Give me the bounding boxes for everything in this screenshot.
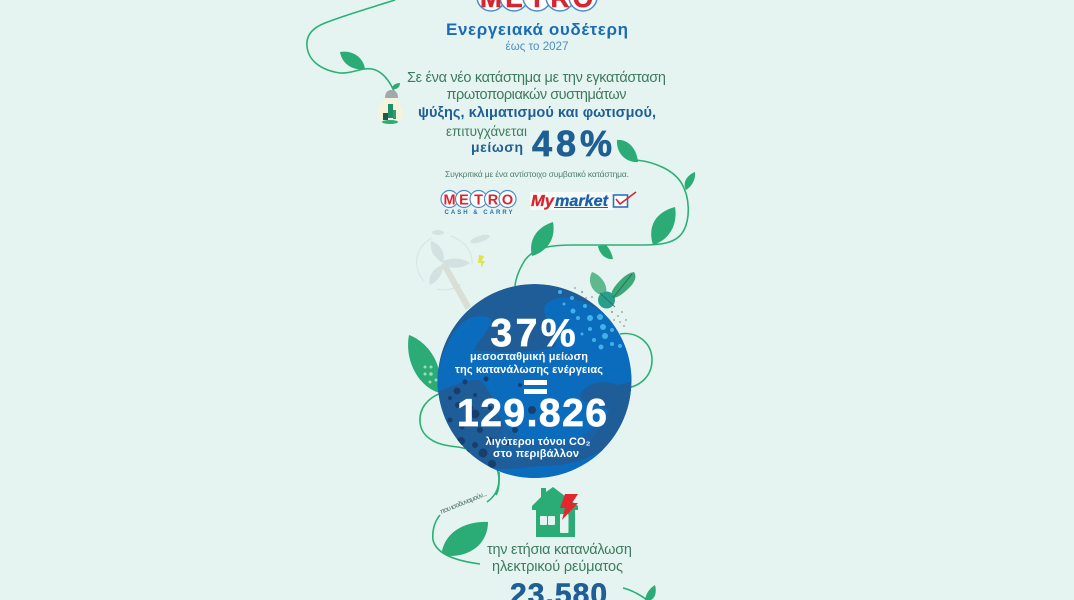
dots: dark blue	[446, 376, 536, 468]
logo: METRO Cash & Carry: E	[459, 192, 469, 208]
text block: annual electricity: την ετήσια κατανάλωση	[487, 542, 632, 558]
globe text: λιγότεροι τόνοι CO₂	[486, 436, 591, 448]
text block: intro	[407, 70, 666, 155]
vine: bottom left	[433, 472, 499, 564]
vine: globe right loop	[620, 334, 652, 388]
continent: bright blue	[430, 298, 640, 442]
title: Ενεργειακά ουδέτερη	[446, 20, 628, 39]
continent: lower centre	[496, 410, 610, 460]
text block: intro: μείωση	[471, 139, 523, 155]
globe text	[455, 312, 607, 460]
text block: annual electricity	[487, 542, 632, 575]
stat: 48%: 48%	[532, 123, 612, 164]
logo: METRO Cash & Carry: O	[502, 192, 513, 208]
vine: globe left loop	[408, 335, 499, 495]
globe text: 37%	[490, 312, 576, 355]
globe	[438, 284, 632, 478]
vine: top left	[307, 0, 400, 91]
logo: METRO Cash & Carry	[441, 190, 516, 216]
continent: bottom lens	[490, 449, 604, 478]
text block: annual electricity: ηλεκτρικού ρεύματος	[492, 559, 623, 575]
text block: intro: Σε ένα νέο κατάστημα με την εγκατάσταση	[407, 70, 666, 86]
text block: intro: ψύξης, κλιματισμού και φωτισμού,	[418, 105, 656, 121]
logo: My market	[530, 192, 636, 210]
globe text: 129.826	[457, 392, 607, 435]
logo: METRO top	[477, 0, 597, 13]
icon: light bulb	[378, 90, 403, 124]
logo: METRO Cash & Carry: M	[443, 192, 456, 208]
logo: My market: market	[555, 193, 609, 210]
text block: intro: επιτυγχάνεται	[446, 124, 527, 139]
icon: wind turbine	[417, 230, 490, 310]
logo: METRO Cash & Carry: R	[488, 192, 499, 208]
leaves on globe	[574, 272, 635, 327]
dots: light blue	[558, 290, 622, 350]
text block: intro: πρωτοποριακών συστημάτων	[446, 87, 626, 103]
note: comparison: Συγκριτικά με ένα αντίστοιχο συμβατικό κατάστημα.	[445, 169, 629, 179]
globe text: μεσοσταθμική μείωση	[470, 351, 588, 363]
icon: house with lightning	[532, 487, 578, 537]
label: rotated caption: που ισοδυναμούν...	[439, 490, 488, 516]
logo: METRO Cash & Carry: T	[474, 192, 483, 208]
logo: My market: My	[531, 193, 555, 210]
title: έως το 2027	[506, 41, 568, 53]
globe text: στο περιβάλλον	[493, 448, 579, 460]
vine: bottom right	[623, 585, 656, 600]
title	[446, 20, 628, 53]
globe text: της κατανάλωσης ενέργειας	[455, 364, 603, 376]
logo: METRO Cash & Carry: CASH & CARRY	[444, 210, 512, 216]
vine: middle right	[515, 140, 695, 286]
infographic	[306, 0, 696, 600]
